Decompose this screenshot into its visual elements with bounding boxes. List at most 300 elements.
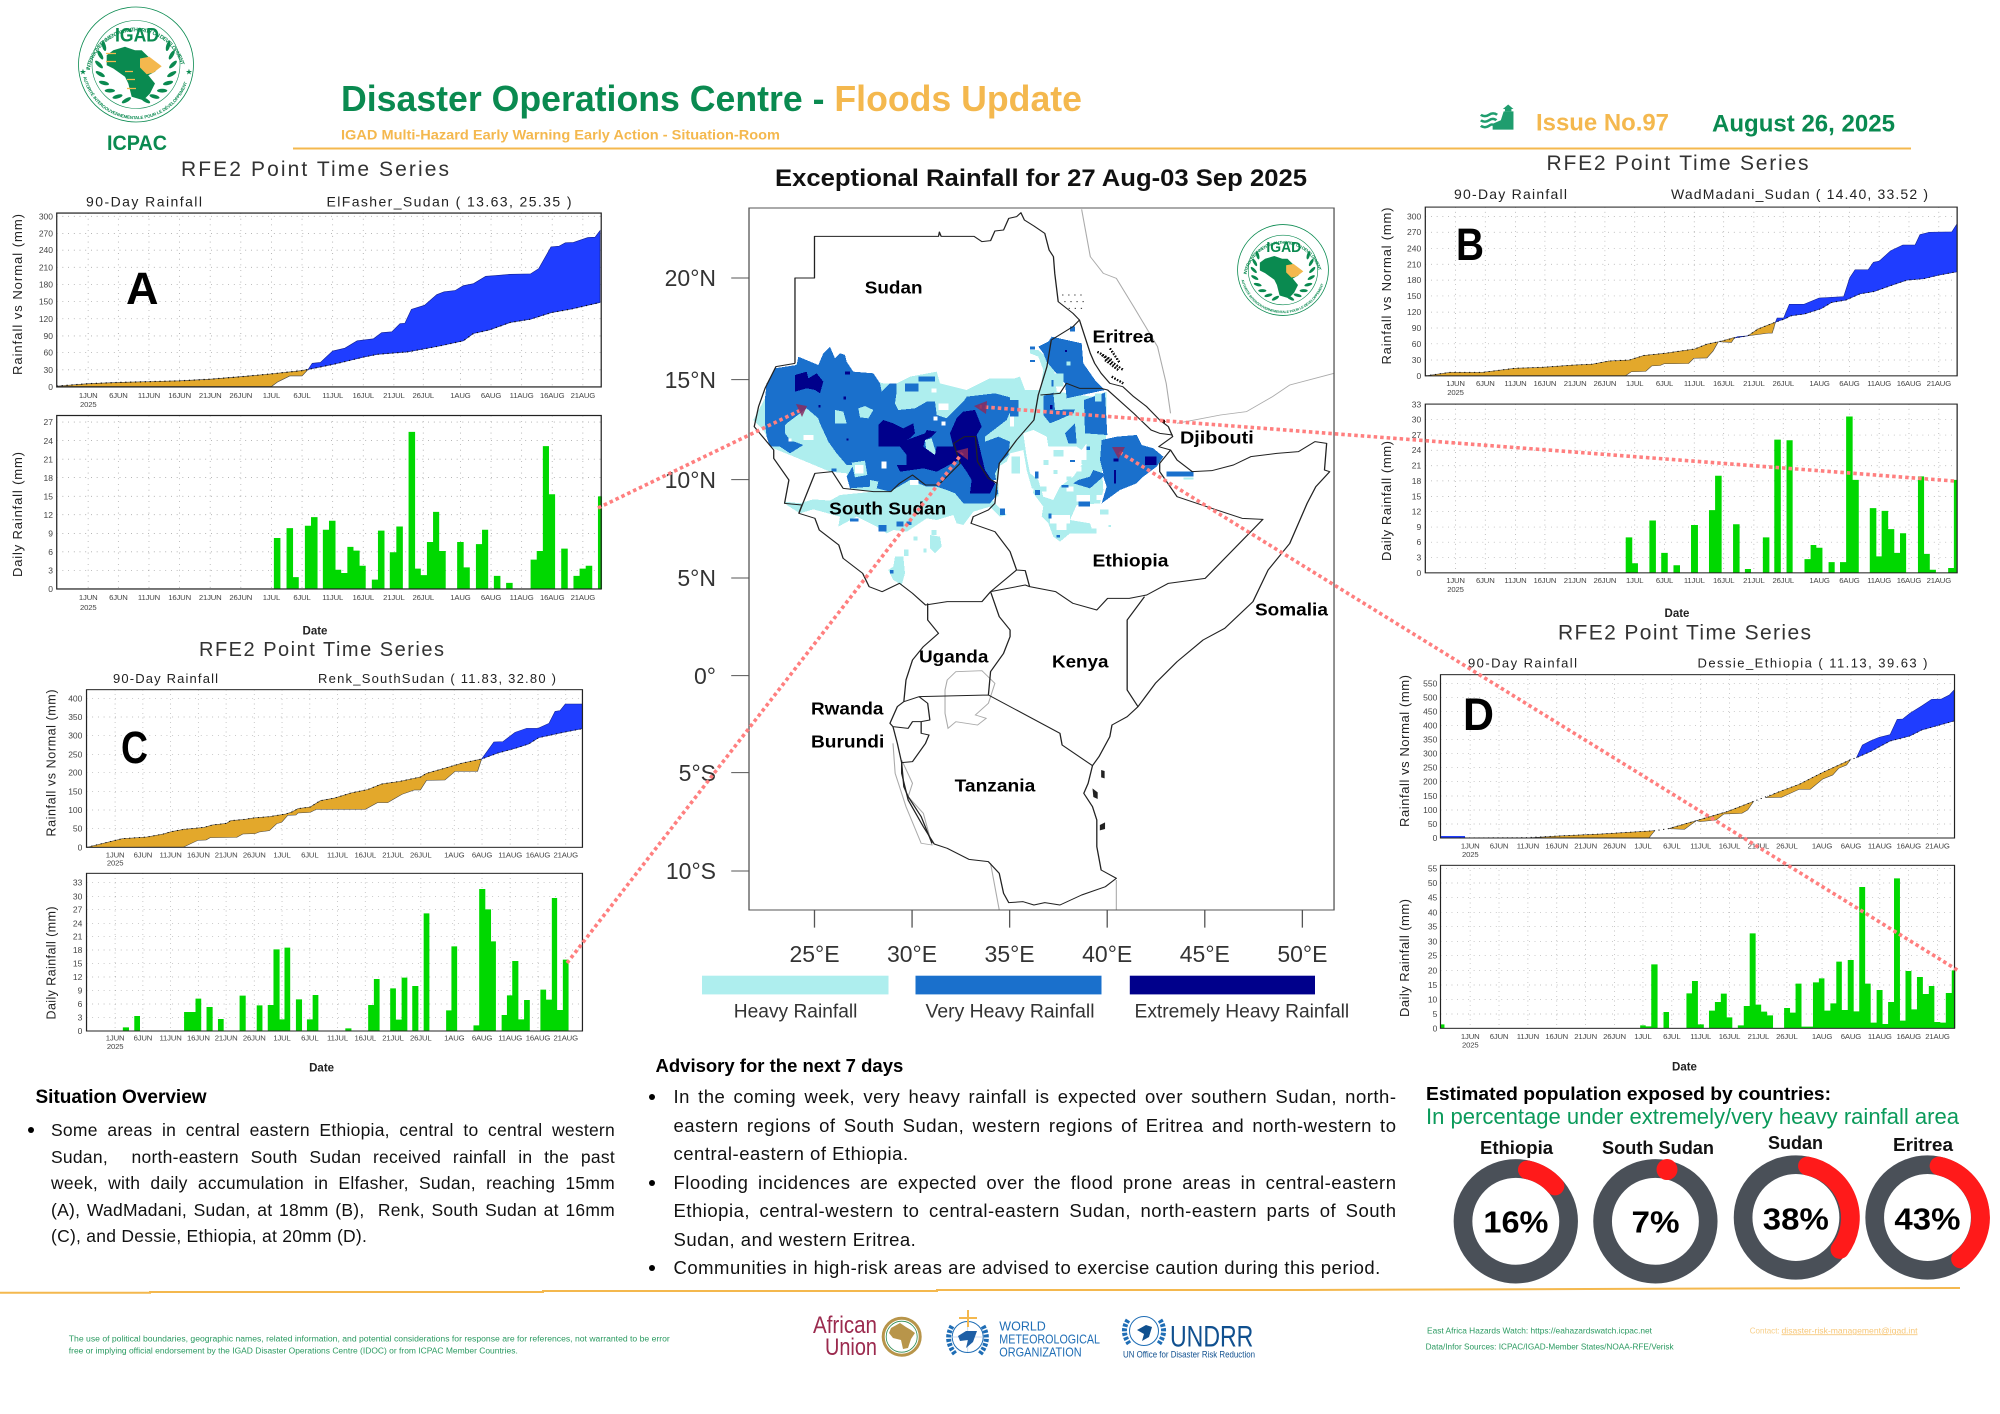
text block: situation overview: (C), and Dessie, Ethiopia, at 20mm (D). (51, 1226, 367, 1246)
chart B subtitle: WadMadani_Sudan ( 14.40, 33.52 ) (1671, 186, 1928, 202)
chart D axis labels: 5 (1433, 1009, 1438, 1019)
chart B axis labels: 90 (1412, 323, 1421, 333)
chart D axis labels: 30 (1428, 936, 1438, 946)
title: Disaster Operations Centre - Floods Update (341, 78, 1082, 119)
text block: advisory: In the coming week, very heavy rainfall is expected over southern Sudan, north- (674, 1086, 1396, 1107)
chart C axis labels: 26JUN (243, 1034, 266, 1043)
legend: Very Heavy Rainfall (926, 1002, 1094, 1023)
chart D subtitle (1468, 655, 1928, 670)
chart A axis labels: 1JUN (79, 391, 98, 400)
chart B axis labels: Daily Rainfall (mm) (1379, 441, 1394, 561)
arrows: red dotted leader lines (567, 401, 1957, 970)
chart B axis labels: 6AUG (1839, 576, 1860, 585)
donut: Eritrea (1875, 1135, 1981, 1270)
chart B plots (1425, 207, 1957, 573)
chart C axis labels: 26JUN (243, 850, 266, 859)
population subheading: In percentage under extremely/very heavy rainfall area (1426, 1104, 1960, 1129)
longitude labels: 40°E (1082, 941, 1132, 967)
chart A axis labels: 26JUL (413, 391, 435, 400)
logo: UNDRR: UN Office for Disaster Risk Reduction (1123, 1350, 1255, 1360)
chart C axis labels: 6JUN (134, 1034, 152, 1043)
text block: situation overview: week, with daily accumulation in Elfasher, Sudan, reaching 15mm (51, 1173, 615, 1193)
chart C axis labels: 26JUL (410, 1034, 432, 1043)
heading: situation overview: Situation Overview (36, 1087, 207, 1108)
chart A axis labels: 1JUL (263, 593, 281, 602)
chart B axis labels: 11AUG (1867, 576, 1891, 585)
latitude labels: 5°S (679, 760, 716, 786)
logo: IGAD on map: AUTORITÉ INTERGOUVERNEMENTALE POUR LE DÉVELOPPEMENT (1241, 280, 1324, 314)
chart B axis labels: 11JUN (1504, 379, 1527, 388)
chart B axis labels: 16JUN (1534, 379, 1556, 388)
chart D axis labels: 16JUN (1545, 842, 1568, 851)
chart D axis labels: 150 (1423, 791, 1438, 801)
chart C axis labels: 6JUL (301, 850, 319, 859)
chart B axis labels: 240 (1407, 243, 1421, 253)
chart B axis labels: 26JUL (1773, 576, 1795, 585)
logo: African Union (813, 1312, 920, 1361)
chart A axis labels: 21JUN (199, 391, 222, 400)
chart B letter: B (1456, 219, 1484, 270)
chart B axis labels: 30 (1412, 355, 1421, 365)
chart D axis labels: 21AUG (1925, 842, 1950, 851)
donut: Ethiopia (1463, 1138, 1569, 1274)
chart C axis labels: 6JUL (301, 1034, 319, 1043)
chart A axis labels: 0 (48, 584, 53, 594)
chart B axis labels: 26JUL (1773, 379, 1795, 388)
chart A subtitle (86, 194, 572, 210)
chart A axis labels: 16JUL (353, 391, 375, 400)
chart B axis labels: 12 (1412, 507, 1421, 517)
chart C axis labels: 250 (68, 749, 83, 759)
chart D axis labels: 250 (1423, 763, 1438, 773)
chart D axis labels: 11AUG (1868, 842, 1892, 851)
chart C axis labels: 16JUL (355, 1034, 377, 1043)
chart B axis labels: 270 (1407, 227, 1421, 237)
chart B axis labels: 1JUL (1626, 576, 1644, 585)
chart A axis labels: 6JUN (109, 391, 128, 400)
chart D axis labels: 0 (1433, 1023, 1438, 1033)
chart A plots (57, 213, 602, 589)
chart B axis labels: 21JUL (1743, 576, 1766, 585)
chart D axis labels: 6AUG (1841, 842, 1861, 851)
donut: South Sudan: 7% (1632, 1205, 1680, 1240)
chart B subtitle (1454, 186, 1928, 202)
chart C axis labels: 0 (78, 842, 83, 852)
logo: IGAD ICPAC header: ★ (185, 68, 193, 76)
chart C axis labels: 2025 (107, 1042, 123, 1051)
logo: IGAD on map (1237, 224, 1329, 316)
chart D axis labels: 21AUG (1925, 1032, 1950, 1041)
footer disclaimer (69, 1335, 670, 1356)
logo: WMO: METEOROLOGICAL (999, 1332, 1100, 1346)
chart C title: RFE2 Point Time Series (199, 639, 444, 661)
chart B axis labels (1379, 208, 1951, 620)
chart B axis labels: 24 (1412, 445, 1421, 455)
longitude labels: 45°E (1180, 941, 1230, 967)
chart D axis labels: 1JUL (1634, 1032, 1652, 1041)
chart C subtitle (113, 671, 556, 686)
chart D axis labels: Rainfall vs Normal (mm) (1397, 675, 1412, 827)
date: August 26, 2025 (1712, 110, 1895, 138)
chart C axis labels: Rainfall vs Normal (mm) (44, 690, 58, 836)
chart D axis labels: 400 (1423, 721, 1438, 731)
chart C axis labels: 200 (68, 768, 83, 778)
chart D axis labels: 11AUG (1868, 1032, 1892, 1041)
country labels: Tanzania (955, 776, 1036, 796)
chart D axis labels: 11JUL (1690, 842, 1712, 851)
chart D axis labels: 450 (1423, 706, 1438, 716)
chart B axis labels: 16AUG (1897, 576, 1921, 585)
chart D axis labels: 2025 (1462, 850, 1478, 859)
chart A axis labels: 11JUN (138, 391, 160, 400)
chart D axis labels: 300 (1423, 749, 1438, 759)
panel: population exposure (1426, 1083, 1981, 1274)
chart D axis labels: 1JUL (1634, 842, 1652, 851)
donut: Sudan (1743, 1133, 1850, 1270)
chart B axis labels: 27 (1412, 430, 1421, 440)
country labels (811, 278, 1328, 796)
chart B title: RFE2 Point Time Series (1546, 152, 1808, 175)
chart B axis labels: 9 (1416, 522, 1421, 532)
chart C axis labels: 26JUL (410, 850, 432, 859)
country labels: Sudan (865, 278, 922, 298)
footer disclaimer: free or implying official endorsement by the IGAD Disaster Operations Centre (IDOC) or from ICPAC Member Countries. (69, 1347, 518, 1356)
chart A axis labels: 21 (44, 454, 53, 464)
chart A axis labels: 26JUN (229, 391, 252, 400)
chart C axis labels: 27 (73, 905, 83, 915)
chart A axis labels: 27 (44, 417, 53, 427)
chart B axis labels: 26JUN (1594, 379, 1616, 388)
chart A subtitle: ElFasher_Sudan ( 13.63, 25.35 ) (326, 194, 572, 210)
chart D axis labels: 1AUG (1812, 1032, 1832, 1041)
donut: Ethiopia: 16% (1483, 1205, 1548, 1240)
chart D axis labels: 550 (1423, 678, 1438, 688)
chart B axis labels: Date (1665, 608, 1689, 620)
logo: African Union: Union (825, 1334, 877, 1361)
chart B axis labels: 2025 (1447, 388, 1464, 397)
chart D letter: D (1463, 689, 1494, 740)
text block: advisory: eastern regions of South Sudan, western regions of Eritrea and north-western to (674, 1114, 1396, 1136)
chart B axis labels: 16JUN (1534, 576, 1556, 585)
chart B axis labels: 16AUG (1897, 379, 1921, 388)
chart B axis labels: 26JUN (1594, 576, 1616, 585)
panel: chart D Dessie (1397, 621, 1955, 1074)
population heading: Estimated population exposed by countries: (1426, 1083, 1831, 1104)
chart A axis labels: Rainfall vs Normal (mm) (10, 214, 25, 375)
map ticks (731, 278, 1302, 928)
chart A axis labels: 120 (39, 314, 53, 324)
chart A axis labels: 21AUG (571, 593, 595, 602)
chart A axis labels: 210 (39, 262, 53, 272)
chart C letter: C (121, 722, 148, 773)
country labels: Ethiopia (1092, 551, 1169, 571)
chart A axis labels: 12 (44, 510, 53, 520)
chart A axis labels: 1JUL (263, 391, 281, 400)
chart A axis labels: 16AUG (540, 391, 565, 400)
chart B axis labels: 150 (1407, 291, 1421, 301)
chart C axis labels: 6 (78, 999, 83, 1009)
longitude labels: 35°E (985, 941, 1035, 967)
longitude labels: 30°E (887, 941, 937, 967)
chart D axis labels: 26JUN (1603, 842, 1626, 851)
chart B axis labels: 33 (1412, 399, 1421, 409)
donut: Ethiopia: Ethiopia (1480, 1138, 1554, 1158)
country labels: Burundi (811, 732, 884, 752)
chart B axis labels: 30 (1412, 415, 1421, 425)
donut: Eritrea: 43% (1894, 1201, 1960, 1236)
chart D axis labels: 45 (1428, 893, 1438, 903)
chart C axis labels: 21JUL (382, 1034, 405, 1043)
chart B axis labels: 16JUL (1713, 576, 1735, 585)
chart D axis labels: 6JUN (1490, 842, 1508, 851)
chart B axis labels: 11AUG (1867, 379, 1891, 388)
logo: WMO: ORGANIZATION (999, 1346, 1082, 1360)
chart A axis labels: 24 (44, 436, 53, 446)
chart C axis labels: 50 (73, 824, 83, 834)
chart B axis labels: Rainfall vs Normal (mm) (1379, 208, 1394, 364)
chart C axis labels: 11AUG (498, 850, 522, 859)
chart D plots (1440, 675, 1955, 1028)
chart A axis labels: 21JUL (383, 593, 406, 602)
chart D axis labels: 26JUN (1603, 1032, 1626, 1041)
chart C axis labels: 15 (73, 959, 83, 969)
chart C axis labels: 6AUG (472, 850, 492, 859)
country labels: Djibouti (1180, 427, 1254, 447)
logo: IGAD on map: INTERGOVERNMENTAL AUTHORITY ON DEVELOPMENT (1244, 240, 1322, 274)
chart C axis labels: 1JUN (106, 850, 124, 859)
country labels: Kenya (1052, 652, 1109, 672)
chart C axis labels: 21JUL (382, 850, 405, 859)
chart B axis labels: 3 (1416, 553, 1421, 563)
donut: Sudan: 38% (1763, 1201, 1829, 1236)
chart A axis labels: 270 (39, 228, 53, 238)
chart D axis labels (1397, 675, 1950, 1074)
logo: IGAD ICPAC header: IGAD (115, 26, 159, 46)
chart B axis labels: 1JUN (1446, 576, 1465, 585)
chart B axis labels: 6 (1416, 537, 1421, 547)
chart A subtitle: 90-Day Rainfall (86, 194, 202, 210)
chart A axis labels: 0 (48, 382, 53, 392)
chart C axis labels: 21 (73, 932, 83, 942)
chart D subtitle: 90-Day Rainfall (1468, 655, 1577, 670)
logo: IGAD ICPAC header: AUTORITÉ INTERGOUVERNEMENTALE POUR LE DÉVELOPPEMENT (83, 77, 187, 120)
chart D axis labels: 500 (1423, 692, 1438, 702)
chart C axis labels: 1JUL (273, 850, 292, 859)
chart C axis labels: 1JUN (106, 1034, 124, 1043)
chart A axis labels: 11AUG (510, 593, 534, 602)
chart D axis labels: 50 (1428, 819, 1438, 829)
text block: situation overview: Sudan, north-eastern South Sudan received rainfall in the past (51, 1147, 615, 1167)
chart C axis labels: 21JUN (215, 1034, 237, 1043)
chart D axis labels: 26JUL (1776, 842, 1799, 851)
chart D axis labels: 20 (1428, 965, 1438, 975)
country labels: South Sudan (829, 499, 946, 519)
chart B axis labels: 0 (1416, 568, 1421, 578)
footer links: East Africa Hazards Watch: https://eahazardswatch.icpac.net (1427, 1325, 1653, 1335)
chart C axis labels: 1JUL (273, 1034, 292, 1043)
chart A axis labels: 1AUG (450, 593, 471, 602)
chart A axis labels: Daily Rainfall (mm) (10, 452, 25, 577)
chart C subtitle: Renk_SouthSudan ( 11.83, 32.80 ) (318, 671, 556, 686)
issue number: Issue No.97 (1536, 110, 1669, 136)
chart C axis labels: 30 (73, 891, 83, 901)
chart D axis labels: 11JUN (1517, 1032, 1539, 1041)
logo: IGAD ICPAC header: INTERGOVERNMENTAL AUTHORITY ON DEVELOPMENT (86, 28, 185, 70)
text block: advisory: Flooding incidences are expected over the flood prone areas in central-eastern (674, 1172, 1396, 1192)
chart D axis labels: 100 (1423, 805, 1438, 815)
latitude labels: 10°S (666, 858, 716, 884)
map frame (749, 208, 1334, 910)
chart D axis labels: 2025 (1462, 1040, 1478, 1049)
chart B axis labels: 16JUL (1713, 379, 1735, 388)
chart A axis labels: 6JUL (293, 593, 312, 602)
chart C subtitle: 90-Day Rainfall (113, 671, 218, 686)
chart C axis labels (44, 690, 578, 1075)
chart D axis labels: 6JUL (1663, 842, 1681, 851)
chart A axis labels: 6JUL (293, 391, 312, 400)
text block: situation overview (28, 1120, 615, 1246)
chart B axis labels: 6JUN (1476, 379, 1495, 388)
chart B axis labels: 1AUG (1809, 576, 1830, 585)
chart D axis labels: 350 (1423, 735, 1438, 745)
legend: Heavy Rainfall (734, 1002, 857, 1023)
chart A axis labels: 26JUL (413, 593, 435, 602)
chart C axis labels: 400 (68, 693, 83, 703)
text block: situation overview: Some areas in central eastern Ethiopia, central to central western (51, 1120, 615, 1140)
chart A axis labels: 11JUL (322, 391, 344, 400)
chart A axis labels: 300 (39, 211, 53, 221)
logo: IGAD ICPAC header: ICPAC (107, 132, 167, 155)
logo: IGAD ICPAC header (78, 6, 194, 155)
panel: rainfall map (665, 208, 1335, 967)
chart A axis labels: 30 (44, 365, 53, 375)
logo: WMO (949, 1310, 1100, 1360)
chart B axis labels: 21AUG (1927, 379, 1951, 388)
chart C axis labels: 21AUG (553, 850, 578, 859)
chart D axis labels: 11JUN (1517, 842, 1539, 851)
logo: UNDRR: UNDRR (1170, 1321, 1253, 1354)
donut: Sudan: Sudan (1768, 1133, 1823, 1153)
panel: chart A ElFasher (10, 158, 602, 638)
chart A axis labels: 21AUG (571, 391, 595, 400)
rainfall area: Eritrea and Ethiopia (1010, 327, 1193, 542)
chart A title: RFE2 Point Time Series (181, 158, 449, 181)
latitude labels: 10°N (665, 467, 716, 493)
chart D axis labels: 1JUN (1461, 842, 1480, 851)
chart A axis labels: Date (303, 626, 327, 638)
footer links: Contact: (1750, 1325, 1780, 1335)
chart A axis labels: 11JUN (138, 593, 160, 602)
chart C axis labels: 100 (68, 805, 83, 815)
chart B axis labels: 1JUL (1626, 379, 1644, 388)
chart D axis labels: 200 (1423, 777, 1438, 787)
chart A axis labels: 18 (44, 473, 53, 483)
chart C axis labels: 2025 (107, 859, 123, 868)
chart A axis labels: 11AUG (510, 391, 534, 400)
chart A axis labels: 26JUN (229, 593, 252, 602)
chart C axis labels: 16AUG (526, 1034, 550, 1043)
chart D axis labels: 21JUL (1748, 842, 1770, 851)
chart B subtitle: 90-Day Rainfall (1454, 186, 1567, 202)
map drawing (731, 208, 1334, 928)
chart B axis labels: 210 (1407, 259, 1421, 269)
chart B axis labels: 120 (1407, 307, 1421, 317)
footer links: disaster-risk-management@igad.int (1782, 1325, 1918, 1335)
panel: chart B WadMadani (1379, 152, 1957, 620)
country labels: Rwanda (811, 699, 884, 719)
chart C axis labels: 1AUG (444, 1034, 465, 1043)
chart A axis labels: 180 (39, 280, 53, 290)
text block: advisory: Sudan, and western Eritrea. (674, 1228, 916, 1250)
logo: IGAD ICPAC header: ★ (79, 68, 87, 76)
chart A axis labels: 2025 (80, 603, 96, 612)
chart D axis labels: 35 (1428, 922, 1438, 932)
heading: advisory: Advisory for the next 7 days (656, 1055, 903, 1076)
chart A axis labels: 6AUG (481, 593, 501, 602)
legend (702, 976, 1349, 1023)
logo: African Union: African (813, 1312, 877, 1339)
text block: advisory (649, 1086, 1396, 1278)
chart A axis labels (10, 211, 595, 638)
logo: IGAD on map: IGAD (1266, 239, 1301, 256)
chart A axis labels: 16JUN (168, 391, 191, 400)
chart D axis labels: 11JUL (1690, 1032, 1712, 1041)
chart B axis labels: 18 (1412, 476, 1421, 486)
chart A letter: A (126, 263, 158, 314)
chart B axis labels: 6JUN (1476, 576, 1495, 585)
chart A axis labels: 150 (39, 297, 53, 307)
chart B axis labels: 15 (1412, 491, 1421, 501)
chart A axis labels: 6JUN (109, 593, 128, 602)
chart D axis labels: 40 (1428, 907, 1438, 917)
latitude labels: 0° (694, 663, 716, 689)
chart A axis labels: 15 (44, 491, 53, 501)
chart C axis labels: 24 (73, 918, 83, 928)
chart D axis labels: 6AUG (1841, 1032, 1861, 1041)
chart C axis labels: 11JUL (327, 850, 349, 859)
logo: UNDRR (1123, 1316, 1255, 1360)
chart D axis labels: 15 (1428, 980, 1438, 990)
donut: South Sudan: South Sudan (1602, 1138, 1714, 1158)
donut: South Sudan (1602, 1138, 1714, 1274)
text block: situation overview: (A), WadMadani, Sudan, at 18mm (B), Renk, South Sudan at 16mm (51, 1200, 615, 1220)
chart C axis labels: 9 (78, 986, 83, 996)
chart C axis labels: 150 (68, 786, 83, 796)
logo: WMO: WORLD (999, 1320, 1046, 1334)
country borders (754, 209, 1334, 910)
chart A axis labels: 60 (44, 348, 53, 358)
chart A axis labels: 240 (39, 245, 53, 255)
chart A axis labels: 6 (48, 547, 53, 557)
map title: Exceptional Rainfall for 27 Aug-03 Sep 2025 (775, 165, 1307, 192)
chart C axis labels: 6JUN (134, 850, 152, 859)
chart A axis labels: 1AUG (450, 391, 471, 400)
chart A axis labels: 21JUN (199, 593, 222, 602)
chart D axis labels: 1AUG (1812, 842, 1832, 851)
chart A axis labels: 16AUG (540, 593, 565, 602)
country labels: Uganda (919, 647, 989, 667)
longitude labels: 25°E (789, 941, 840, 967)
chart C axis labels: 11JUN (160, 850, 182, 859)
chart C axis labels: 12 (73, 972, 83, 982)
longitude labels: 50°E (1277, 941, 1327, 967)
chart C axis labels: 300 (68, 731, 83, 741)
chart B axis labels: 300 (1407, 211, 1421, 221)
chart D axis labels: 55 (1428, 863, 1438, 873)
chart D axis labels: 16JUL (1719, 1032, 1741, 1041)
chart D axis labels: 21JUN (1574, 1032, 1597, 1041)
chart A axis labels: 16JUL (353, 593, 375, 602)
